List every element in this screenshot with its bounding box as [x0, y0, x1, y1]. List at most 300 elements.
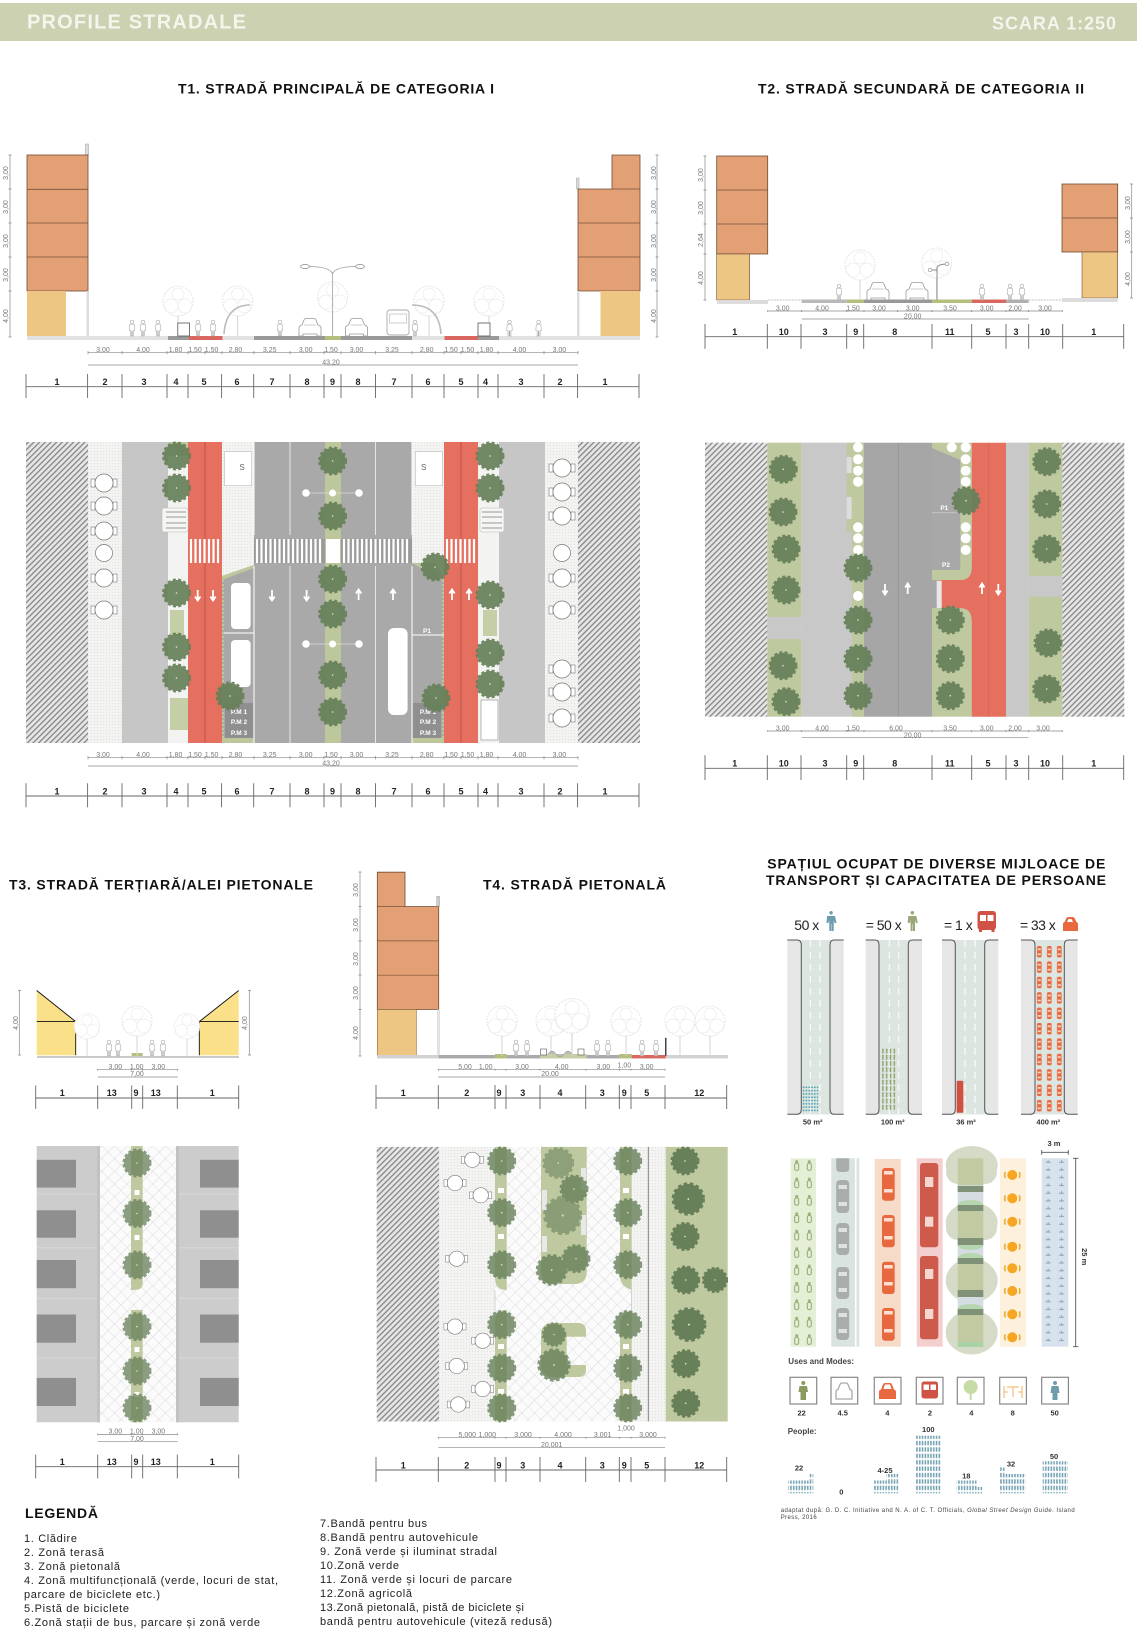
width dimensions	[88, 347, 578, 366]
height dimensions: 3,00	[1125, 230, 1132, 244]
plan zone number scale: 2	[464, 1460, 469, 1470]
icon: orange car box	[874, 1377, 901, 1404]
plan zone number scale: 9	[496, 1460, 502, 1470]
T4 cross-section	[353, 872, 728, 1109]
height dimensions	[698, 156, 1133, 300]
heading T3: T3. STRADĂ TERȚIARĂ/ALEI PIETONALE	[9, 876, 313, 892]
zone number scale: 6	[234, 377, 240, 387]
plan width dimensions: 3,00	[553, 752, 566, 759]
plan width dimensions: 1,50	[188, 752, 202, 759]
plan zone number scale: 8	[304, 786, 310, 796]
width dimensions: 3,00	[906, 306, 920, 312]
plan zone number scale: 4	[557, 1460, 563, 1470]
plan width dimensions: 2,00	[1008, 726, 1022, 732]
cafe tables	[91, 459, 575, 727]
plan zone number scale: 7	[391, 786, 397, 796]
trees	[770, 449, 1061, 715]
zone number scale: 12	[694, 1088, 704, 1098]
crosswalks	[191, 539, 474, 563]
width dimensions: 3,00	[776, 306, 790, 312]
zone number scale: 4	[557, 1088, 563, 1098]
width dimensions: 1,50	[846, 306, 860, 312]
width dimensions: 20,00	[541, 1071, 559, 1078]
legend column 2: 11. Zonă verde și locuri de parcare	[320, 1574, 512, 1586]
mode equivalence row: 50 x	[794, 917, 819, 933]
height dimensions: 3,00	[353, 952, 360, 966]
people capacity chart: 32	[1007, 1460, 1015, 1468]
zone number scale: 5	[985, 327, 991, 337]
plan zone number scale: 3	[1013, 758, 1019, 768]
sketched trees and street furniture	[129, 264, 541, 336]
width dimensions: 3,00	[108, 1064, 122, 1071]
width dimensions: 4,00	[815, 306, 829, 312]
width dimensions: 43,20	[322, 360, 340, 366]
strip: bicycles	[790, 1158, 816, 1347]
zone number scale: 9	[853, 327, 858, 337]
uses and modes row: 8	[1011, 1408, 1015, 1418]
height dimensions: 4,00	[13, 1016, 20, 1030]
parking and bus stop areas: S	[239, 463, 245, 472]
zone number scale: 1	[60, 1088, 65, 1098]
plan zone number scale	[26, 783, 639, 807]
plan zone number scale: 9	[622, 1460, 627, 1470]
width dimensions: 4,00	[555, 1064, 569, 1071]
people capacity chart: 50	[1050, 1452, 1058, 1461]
plan width dimensions: 4,000	[554, 1432, 572, 1439]
strip: pedestrians	[1042, 1158, 1068, 1347]
width and length indicators: 25 m	[1080, 1248, 1089, 1266]
heading T2: T2. STRADĂ SECUNDARĂ DE CATEGORIA II	[758, 80, 1084, 96]
people capacity chart: 22	[795, 1464, 803, 1472]
trees in agricultural zone	[672, 1148, 727, 1416]
height dimensions: 3,00	[1125, 196, 1132, 210]
trees	[124, 1150, 150, 1421]
plan width dimensions: 1,80	[480, 752, 493, 759]
zone number scale	[36, 1086, 239, 1109]
zone number scale: 8	[304, 377, 310, 387]
plan zone number scale: 1	[210, 1457, 215, 1467]
benches and bike racks	[162, 508, 504, 740]
width dimensions: 1,00	[479, 1064, 493, 1071]
plan zone number scale: 5	[458, 786, 464, 796]
zone number scale: 8	[355, 377, 361, 387]
plan width dimensions: 3,00	[151, 1429, 165, 1436]
width dimensions: 2,80	[420, 347, 434, 354]
plan zone number scale: 6	[425, 786, 431, 796]
legend column 1: 5.Pistă de biciclete	[24, 1603, 129, 1615]
height dimensions: 3,00	[3, 200, 10, 214]
plan zone number scale: 5	[985, 758, 991, 768]
zone number scale	[705, 324, 1124, 349]
width dimensions: 1,00	[130, 1064, 144, 1071]
panel: T2 secondary street	[698, 80, 1133, 780]
plan width dimensions: 2,80	[229, 752, 242, 759]
legend column 2	[320, 1518, 552, 1628]
T2 cross-section	[698, 156, 1133, 349]
zone number scale: 5	[644, 1088, 649, 1098]
plan width dimensions: 20,00	[904, 732, 922, 740]
legend column 1: 3. Zonă pietonală	[24, 1561, 121, 1573]
heading: transport space: SPAȚIUL OCUPAT DE DIVERSE MIJLOACE DE	[767, 855, 1105, 871]
icon: table box	[1000, 1377, 1026, 1404]
plan width dimensions: 1,50	[205, 752, 219, 759]
plan zone number scale: 11	[945, 758, 954, 768]
plan width dimensions: 3,000	[639, 1432, 657, 1439]
uses and modes row: 4.5	[837, 1408, 848, 1418]
width and length indicators: 3 m	[1048, 1139, 1061, 1148]
plan zone number scale: 10	[1040, 758, 1050, 768]
people capacity chart: 100	[922, 1425, 935, 1434]
zone number scale: 7	[391, 377, 397, 387]
zone number scale: 10	[779, 327, 789, 337]
plan width dimensions: 3,00	[108, 1429, 122, 1436]
legend column 2: 7.Bandă pentru bus	[320, 1518, 428, 1530]
plan width dimensions	[98, 1429, 178, 1443]
uses and modes row: 22	[798, 1408, 806, 1418]
plan width dimensions: 3,50	[943, 726, 957, 732]
zone number scale: 1	[602, 377, 608, 387]
plan width dimensions: 1,80	[169, 752, 183, 759]
panel: T3 tertiary street	[9, 876, 313, 1478]
strip: trees and planters	[946, 1146, 998, 1354]
height dimensions: 3,00	[651, 166, 658, 180]
zone number scale: 4	[483, 377, 488, 387]
plan width dimensions: 1,50	[461, 752, 474, 759]
plan zone number scale: 5	[644, 1460, 649, 1470]
zone number scale: 13	[107, 1088, 117, 1098]
icon: bus box	[916, 1377, 943, 1404]
plan zone number scale	[705, 755, 1124, 780]
plan zone number scale: 7	[269, 786, 275, 796]
plan zone number scale: 8	[892, 758, 897, 768]
mode equivalence row: = 33 x	[1020, 917, 1056, 933]
width dimensions: 1,00	[617, 1062, 631, 1070]
width dimensions: 3,00	[96, 347, 110, 354]
labels and arrows: P1	[940, 505, 949, 512]
parking and bus stop areas: P.M 2	[231, 719, 247, 726]
width dimensions: 4,00	[513, 347, 526, 354]
mode equivalence row: = 50 x	[866, 917, 902, 933]
width and length indicators	[1042, 1139, 1089, 1347]
width dimensions: 3,00	[1038, 306, 1052, 312]
plan width dimensions: 1,50	[846, 726, 860, 732]
zone number scale: 10	[1040, 327, 1050, 337]
plan zone number scale: 1	[54, 786, 60, 796]
plan width dimensions	[768, 726, 1062, 740]
zone number scale: 8	[892, 327, 897, 337]
plan zone number scale: 1	[732, 758, 737, 768]
plan zone number scale: 4	[173, 786, 179, 796]
plan zone number scale: 3	[518, 786, 524, 796]
width dimensions: 1,80	[169, 347, 183, 354]
height dimensions: 4,00	[1125, 272, 1132, 286]
plan width dimensions: 1,50	[444, 752, 458, 759]
lane arrows	[195, 590, 472, 600]
height dimensions: 3,00	[353, 986, 360, 1000]
zone number scale: 3	[141, 377, 147, 387]
strip: buses	[917, 1158, 943, 1347]
legend column 2: bandă pentru autovehicule (viteză redusă)	[320, 1616, 552, 1628]
zone number scale: 3	[518, 377, 524, 387]
source citation	[781, 1508, 1075, 1521]
icon: pedestrian	[826, 911, 836, 931]
height dimensions: 4,00	[353, 1026, 360, 1040]
bike lanes	[188, 442, 478, 743]
parking and bus stop areas: P.M 3	[231, 730, 247, 737]
sketched trees, cars and pedestrians	[836, 248, 1025, 300]
plan zone number scale: 9	[133, 1457, 139, 1467]
zone number scale: 9	[133, 1088, 139, 1098]
header band	[0, 3, 1137, 41]
plan zone number scale	[376, 1457, 727, 1482]
road: cyclists 100 m2: 100 m²	[881, 1118, 905, 1126]
plan width dimensions: 3,00	[1036, 726, 1050, 732]
T1 cross-section	[3, 144, 658, 398]
plan zone number scale: 10	[779, 758, 789, 768]
width dimensions: 3,00	[151, 1064, 165, 1071]
road comparison diagrams	[787, 940, 1078, 1126]
zone number scale: 5	[201, 377, 207, 387]
plan zone number scale: 1	[602, 786, 608, 796]
parking and bus stop areas: P.M 3	[420, 730, 436, 737]
plan width dimensions: 3,000	[514, 1432, 532, 1439]
height dimensions: 3,00	[3, 268, 10, 282]
zone number scale: 5	[458, 377, 464, 387]
plan width dimensions: 4,00	[136, 752, 150, 759]
icon: car	[1063, 917, 1078, 931]
trees	[164, 443, 503, 725]
uses and modes row	[788, 1357, 1068, 1418]
zone number scale: 9	[622, 1088, 627, 1098]
width dimensions: 5,00	[458, 1064, 472, 1071]
zone number scale: 2	[464, 1088, 469, 1098]
plan zone number scale: 2	[102, 786, 108, 796]
heading: transport space	[766, 855, 1106, 888]
zone number scale: 9	[496, 1088, 502, 1098]
parking and bus stop areas: P.M 1	[231, 709, 247, 716]
plan width dimensions: 3,00	[350, 752, 363, 759]
legend column 1: 6.Zonă stații de bus, parcare și zonă verde	[24, 1617, 260, 1629]
road: cars 400 m2: 400 m²	[1036, 1118, 1061, 1126]
panel: transport space and capacity	[766, 855, 1106, 1521]
plan width dimensions: 6,00	[889, 726, 903, 732]
plan zone number scale: 3	[520, 1460, 525, 1470]
height dimensions: 4,00	[3, 309, 10, 323]
parking and bus stop areas: P.M 2	[420, 719, 436, 726]
height dimensions: 3,00	[651, 234, 658, 248]
road: cyclists 100 m2	[866, 940, 922, 1126]
plan zone number scale: 1	[60, 1457, 65, 1467]
page title: PROFILE STRADALE	[27, 12, 246, 34]
mode equivalence row: = 1 x	[944, 917, 973, 933]
plan width dimensions	[88, 752, 578, 768]
T4 plan view	[376, 1147, 728, 1482]
plan width dimensions: 1,50	[324, 752, 338, 759]
zone number scale	[26, 374, 639, 398]
bike lane with junction	[936, 443, 1006, 717]
central green strip	[131, 1146, 143, 1422]
plan zone number scale: 13	[107, 1457, 117, 1467]
icon: tree box	[957, 1377, 984, 1404]
green medians and planters	[495, 1147, 632, 1422]
zone number scale: 1	[401, 1088, 406, 1098]
street use strips	[790, 1146, 1068, 1354]
uses and modes row: 4	[969, 1408, 974, 1418]
people capacity chart: 18	[962, 1472, 970, 1480]
width dimensions: 3,25	[263, 347, 277, 354]
icon: pedestrian box	[1042, 1377, 1068, 1404]
legend column 1: parcare de biciclete etc.)	[24, 1589, 160, 1601]
width dimensions: 7,00	[130, 1071, 144, 1078]
legend column 2: 10.Zonă verde	[320, 1560, 399, 1572]
height dimensions: 3,00	[353, 918, 360, 932]
width dimensions	[98, 1064, 178, 1078]
legend column 1: 4. Zonă multifuncțională (verde, locuri de stat,	[24, 1575, 278, 1587]
height dimensions: 3,00	[698, 168, 705, 182]
width dimensions: 1,50	[205, 347, 219, 354]
legend column 2: 8.Bandă pentru autovehicule	[320, 1532, 478, 1544]
labels and arrows: P2	[942, 562, 950, 569]
plan zone number scale: 9	[853, 758, 858, 768]
width dimensions	[438, 1062, 665, 1078]
cafe tables	[444, 1152, 494, 1412]
plan width dimensions: 4,00	[815, 726, 829, 732]
plan width dimensions: 3,25	[385, 752, 399, 759]
width dimensions: 3,00	[553, 347, 566, 354]
width dimensions: 3,00	[980, 306, 994, 312]
plan width dimensions	[438, 1426, 665, 1449]
trees	[489, 1148, 641, 1421]
T3 cross-section	[13, 990, 251, 1109]
height dimensions	[13, 990, 251, 1055]
height dimensions: 3,00	[651, 268, 658, 282]
height dimensions: 3,00	[3, 234, 10, 248]
height dimensions: 3,00	[698, 201, 705, 215]
plan width dimensions: 3,25	[263, 752, 277, 759]
zone number scale: 3	[822, 327, 828, 337]
width dimensions: 3,00	[596, 1064, 610, 1071]
plan width dimensions: 3,00	[776, 726, 790, 732]
parking and bus stop areas: P.M 1	[420, 709, 436, 716]
width dimensions: 2,80	[229, 347, 242, 354]
T2 plan view	[705, 442, 1124, 780]
plan zone number scale: 6	[234, 786, 240, 796]
width dimensions: 4,00	[136, 347, 150, 354]
height dimensions: 4,00	[651, 309, 658, 323]
plan width dimensions: 3,001	[594, 1432, 612, 1439]
height dimensions: 4,00	[242, 1016, 249, 1030]
road: pedestrians 50 m2: 50 m²	[803, 1118, 823, 1126]
people capacity chart: 4-25	[877, 1466, 893, 1475]
plan width dimensions: 1,00	[130, 1429, 144, 1436]
zone number scale: 4	[173, 377, 179, 387]
zone number scale: 2	[557, 377, 563, 387]
width dimensions: 1,50	[444, 347, 458, 354]
heading: transport space: TRANSPORT ȘI CAPACITATEA DE PERSOANE	[766, 872, 1106, 888]
legend heading: LEGENDĂ	[25, 1505, 98, 1521]
plan width dimensions: 3,00	[980, 726, 994, 732]
height dimensions: 3,00	[651, 200, 658, 214]
labels and arrows	[847, 457, 1001, 594]
plan width dimensions: 43,20	[322, 760, 340, 768]
width dimensions: 3,00	[872, 306, 886, 312]
road: pedestrians 50 m2	[787, 940, 844, 1126]
plan zone number scale: 13	[151, 1457, 161, 1467]
zone number scale: 1	[210, 1088, 215, 1098]
strip: cafe tables	[1000, 1158, 1026, 1347]
people capacity chart: 0	[839, 1488, 843, 1496]
width dimensions: 20,00	[904, 314, 922, 320]
zone number scale: 1	[1091, 327, 1096, 337]
building footprints	[37, 1160, 239, 1406]
width dimensions: 1,50	[324, 347, 338, 354]
zone number scale: 2	[102, 377, 108, 387]
people capacity chart	[788, 1425, 1068, 1496]
zone number scale: 3	[1013, 327, 1019, 337]
plan zone number scale: 9	[330, 786, 335, 796]
zone number scale: 3	[520, 1088, 525, 1098]
T1 plan view	[26, 442, 640, 807]
width dimensions: 3,25	[385, 347, 399, 354]
legend column 1: 2. Zonă terasă	[24, 1547, 105, 1559]
road: bus 36 m2: 36 m²	[956, 1118, 976, 1126]
plan zone number scale: 3	[822, 758, 828, 768]
strip: orange cars	[875, 1159, 901, 1347]
width dimensions: 3,00	[350, 347, 363, 354]
height dimensions: 2,64	[698, 233, 705, 247]
plan zone number scale: 4	[483, 786, 488, 796]
width dimensions: 3,00	[515, 1064, 529, 1071]
zone number scale: 1	[732, 327, 737, 337]
plan zone number scale: 2	[557, 786, 563, 796]
zone number scale: 11	[945, 327, 954, 337]
plan width dimensions: 2,80	[420, 752, 434, 759]
parking and bus stop areas	[222, 442, 444, 743]
strip: cars	[831, 1158, 859, 1347]
plan zone number scale: 1	[1091, 758, 1096, 768]
zone number scale: 7	[269, 377, 275, 387]
road: cars 400 m2	[1021, 940, 1078, 1126]
source citation: Press, 2016	[781, 1515, 817, 1521]
source citation: adaptat după: G. D. C. Initiative and N. A. of C. T. Officials, Global Street Design Guide. Island	[781, 1508, 1075, 1514]
plan zone number scale: 3	[141, 786, 147, 796]
plan zone number scale	[36, 1455, 239, 1478]
legend column 2: 13.Zonă pietonală, pistă de biciclete și	[320, 1602, 524, 1614]
panel: T1 main street	[3, 80, 658, 807]
heading T4: T4. STRADĂ PIETONALĂ	[483, 876, 666, 892]
plan width dimensions: 3,00	[299, 752, 313, 759]
uses and modes row: 2	[928, 1408, 932, 1418]
benches and lamps	[498, 1168, 629, 1394]
mode equivalence row	[794, 911, 1078, 933]
height dimensions: 3,00	[3, 166, 10, 180]
height dimensions: 4,00	[698, 271, 705, 285]
legend column 2: 12.Zonă agricolă	[320, 1588, 413, 1600]
zone number scale: 3	[600, 1088, 605, 1098]
icon: cyclist	[908, 911, 918, 931]
plan width dimensions: 1,000	[617, 1426, 635, 1432]
width dimensions: 2,00	[1008, 306, 1022, 312]
plan width dimensions: 7,00	[130, 1436, 144, 1443]
width dimensions	[768, 306, 1062, 320]
uses and modes row: 4	[885, 1408, 890, 1418]
width dimensions: 3,00	[640, 1064, 654, 1071]
uses and modes row: Uses and Modes:	[788, 1357, 854, 1366]
plan zone number scale: 8	[355, 786, 361, 796]
icon: bus	[978, 911, 996, 932]
legend column 1: 1. Clădire	[24, 1533, 77, 1545]
width dimensions: 1,50	[461, 347, 474, 354]
